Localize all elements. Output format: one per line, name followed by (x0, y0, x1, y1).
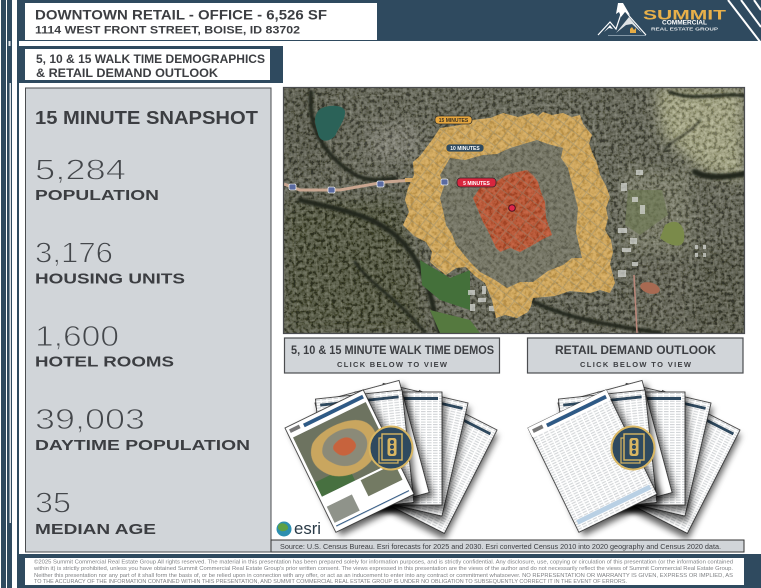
stat: daytime population: 39,003 (35, 404, 145, 436)
satellite grain (284, 88, 744, 333)
disclaimer text: within it) is strictly prohibited, unless you have obtained Summit Commercial Real Estate Group's prior written consent. The views expressed in this presentation are the views of the author and do not necessarily reflect the views of Summit Commercial Real Estate Group. (33, 566, 733, 572)
stat: daytime population (35, 404, 250, 454)
highway (284, 180, 414, 190)
pond (315, 106, 345, 141)
label: 5 minutes (457, 178, 496, 187)
diagonal corner stripes (728, 0, 761, 43)
logo: Summit Commercial Real Estate Group: COMMERCIAL (662, 21, 707, 27)
button: retail demand outlook (528, 338, 743, 373)
title block: DOWNTOWN RETAIL - OFFICE - 6,526 SF (35, 6, 327, 22)
button: retail demand outlook: CLICK BELOW TO VIEW (580, 360, 692, 369)
source bar: Source: U.S. Census Bureau. Esri forecasts for 2025 and 2030. Esri converted Census 2010 into 2020 geography and Census 2020 data. (280, 542, 721, 551)
title block: 1114 WEST FRONT STREET, BOISE, ID 83702 (35, 24, 300, 36)
stat: hotel rooms: HOTEL ROOMS (35, 354, 174, 371)
button: walk time demos: 5, 10 & 15 MINUTE WALK TIME DEMOS (291, 345, 494, 357)
stat: population: 5,284 (35, 154, 126, 186)
esri logo: esri (294, 520, 321, 538)
highway shields (289, 179, 448, 193)
panel: 15 minute snapshot (26, 88, 271, 552)
map border (284, 88, 744, 334)
report pages: walk time demos (285, 380, 497, 533)
zone grain and streets (400, 110, 620, 320)
stat: median age (35, 488, 156, 538)
stat: population: POPULATION (35, 187, 159, 204)
logo: Summit Commercial Real Estate Group: REAL ESTATE GROUP (651, 27, 719, 33)
subheading block: & RETAIL DEMAND OUTLOOK (36, 66, 218, 80)
stat: population (35, 154, 159, 204)
stat: median age: 35 (35, 488, 71, 520)
terrain tones (284, 88, 744, 333)
15 minute walk zone (403, 112, 615, 318)
icon: globe (276, 522, 292, 536)
subheading block: 5, 10 & 15 WALK TIME DEMOGRAPHICS (36, 52, 265, 66)
button: walk time demos (284, 338, 500, 373)
disclaimer text: Neither this presentation nor any part of it shall form the basis of, or be relied upon in connection with any offer, or act as an inducement to enter into any contract or commitment whatsoever. NO REPRESENTATION OR WARRANTY IS GIVEN, EXPRESS OR IMPLIED, AS (34, 573, 733, 579)
button: retail demand outlook: RETAIL DEMAND OUTLOOK (555, 345, 717, 357)
stat: housing units: 3,176 (35, 238, 113, 270)
stat: hotel rooms: 1,600 (35, 321, 119, 353)
map: walk time satellite map (284, 88, 744, 333)
stat: median age: MEDIAN AGE (35, 521, 156, 538)
icon: mountains (598, 3, 646, 36)
cover sheet with table (528, 390, 657, 532)
5 minute walk zone (473, 170, 552, 252)
label: 10 minutes: 10 MINUTES (450, 146, 480, 152)
label: 5 minutes: 5 MINUTES (463, 181, 490, 187)
footer band with disclaimer (17, 554, 761, 588)
10 minute walk zone (440, 140, 582, 288)
stat: housing units (35, 238, 185, 288)
bright downtown buildings (468, 170, 706, 311)
report pages: retail demand outlook (528, 380, 740, 533)
disclaimer text: ©2025 Summit Commercial Real Estate Group All rights reserved. The material in this presentation has been prepared solely for information purposes, and is strictly confidential. Any disclosure, use, copying or circulation of this presentation (or the information contained (34, 559, 733, 566)
disclaimer text (33, 559, 733, 585)
esri logo (276, 520, 321, 538)
site marker (509, 205, 515, 211)
label: 15 minutes: 15 MINUTES (439, 118, 469, 124)
heading: snapshot: 15 MINUTE SNAPSHOT (35, 108, 258, 128)
river and tree lines (300, 92, 744, 333)
title block (25, 3, 377, 40)
header band (17, 0, 761, 43)
disclaimer text: TO THE ACCURACY OF THE INFORMATION CONTAINED WITHIN THIS PRESENTATION, AND SUMMIT COMMERCIAL REAL ESTATE GROUP IS UNDER NO OBLIGATION TO SUBSEQUENTLY CORRECT IT IN THE EVENT OF ERRORS. (34, 579, 627, 585)
icon: traffic signal document (370, 426, 412, 470)
label: 10 minutes (446, 144, 484, 152)
stat: daytime population: DAYTIME POPULATION (35, 437, 250, 454)
subheading block (19, 46, 283, 83)
button: walk time demos: CLICK BELOW TO VIEW (337, 360, 448, 369)
logo: Summit Commercial Real Estate Group: SUMMIT (643, 8, 727, 22)
logo: Summit Commercial Real Estate Group (598, 3, 727, 36)
icon: traffic signal document (612, 426, 654, 470)
label: 15 minutes (435, 116, 472, 124)
stat: hotel rooms (35, 321, 174, 371)
stat: housing units: HOUSING UNITS (35, 271, 185, 288)
left edge stripes (1, 0, 19, 588)
green parks (420, 260, 470, 310)
cover sheet with map (285, 390, 414, 532)
